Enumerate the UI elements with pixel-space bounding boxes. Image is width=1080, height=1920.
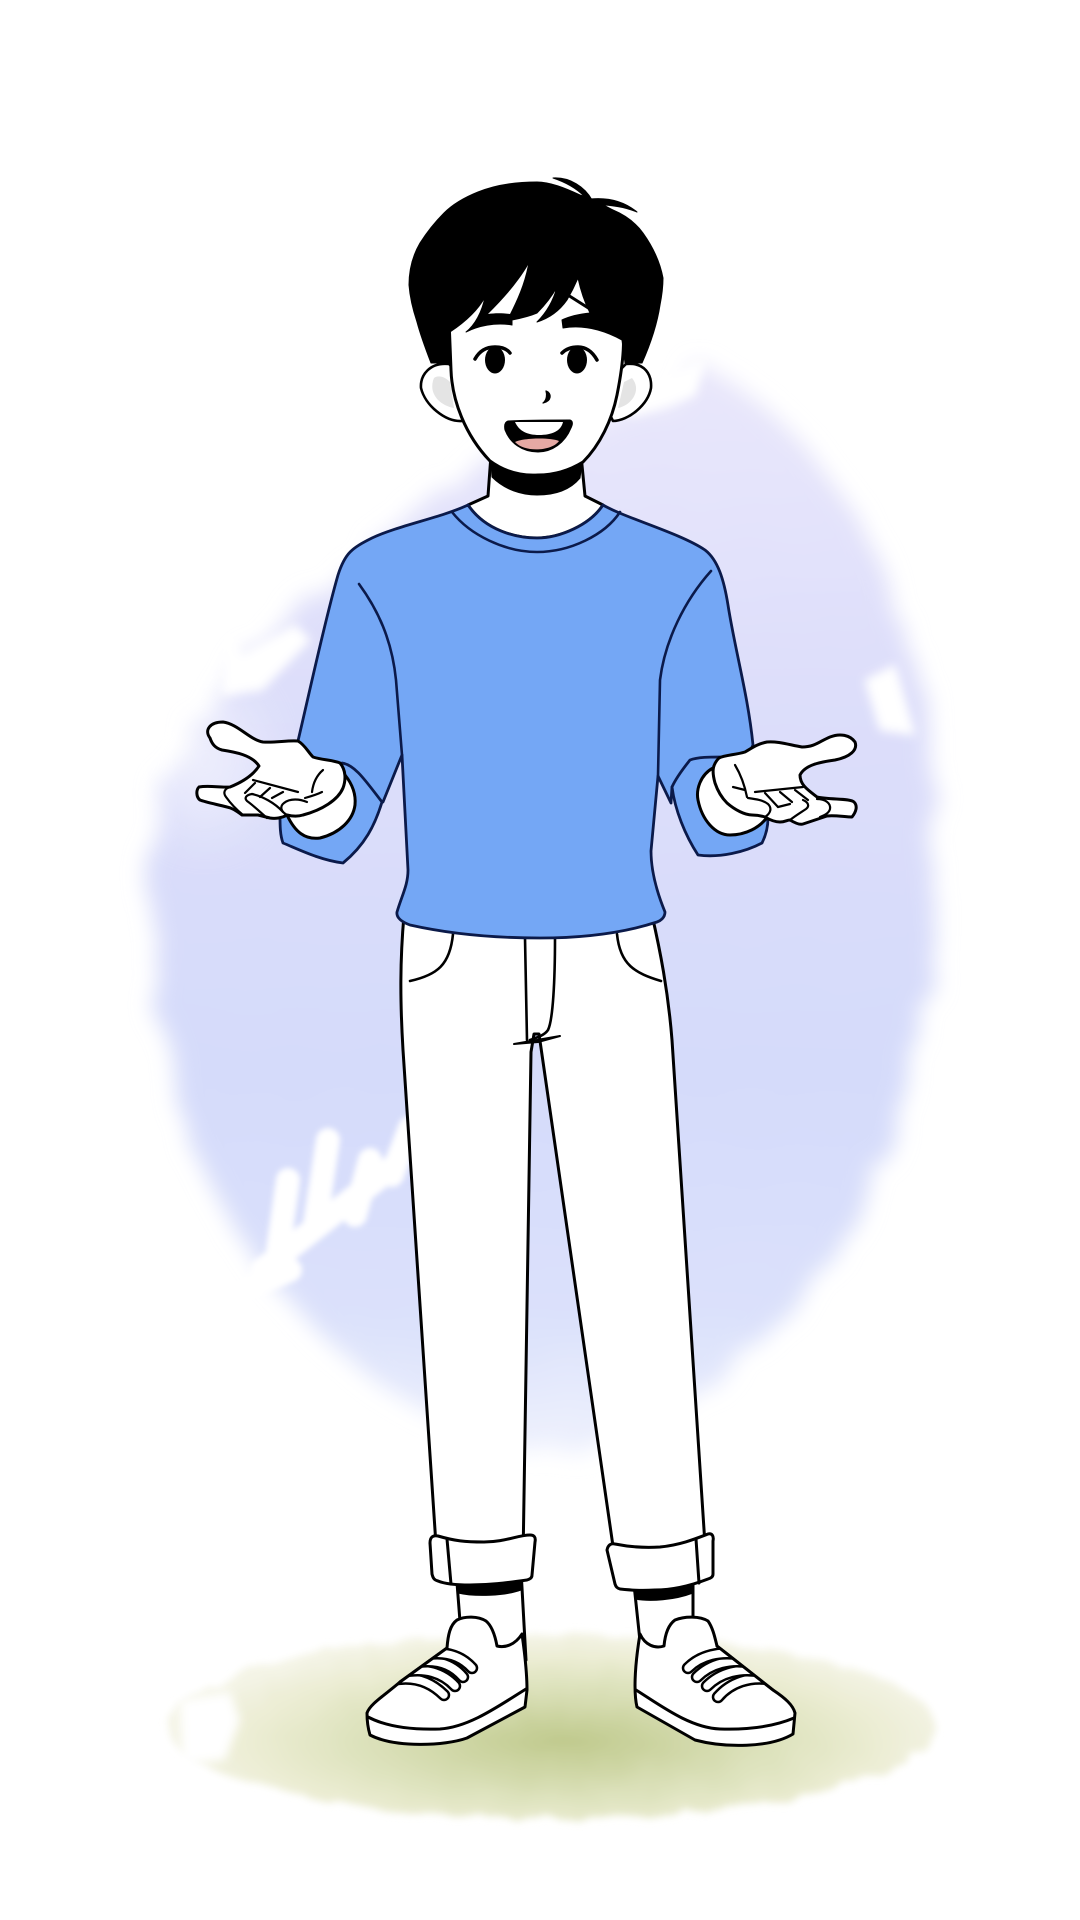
left sleeve cuff [280, 763, 382, 863]
left sole line [368, 1689, 526, 1729]
right armhole seam [658, 571, 711, 776]
neck [468, 455, 603, 538]
tongue [515, 438, 559, 449]
right trouser cuff [607, 1534, 713, 1590]
left armhole seam [359, 584, 402, 755]
ears [421, 364, 651, 421]
nose [543, 391, 550, 403]
ear shading [432, 376, 454, 408]
laces [392, 1653, 472, 1695]
shirt body [298, 505, 753, 938]
background: soft light wash at left [155, 690, 255, 830]
right sock [633, 1575, 694, 1660]
right palm and fingers [713, 735, 856, 824]
right sleeve cuff [672, 757, 768, 856]
left fingers detail [224, 770, 323, 818]
illustration: standing man with open hands [138, 177, 944, 1825]
mouth [505, 420, 572, 452]
left wrist [287, 775, 355, 838]
right wrist [698, 768, 768, 835]
left sock [456, 1570, 526, 1660]
background: olive ground shadow [168, 1634, 936, 1818]
left shoe [367, 1617, 527, 1744]
hair [409, 182, 663, 363]
trousers [401, 915, 706, 1560]
left trouser cuff [430, 1535, 535, 1585]
right sole line [636, 1690, 794, 1729]
fly tack [514, 1036, 560, 1044]
background: lavender watercolor blob [151, 358, 934, 1452]
eye: right [562, 346, 597, 374]
white fringe highlight [488, 265, 528, 314]
head [409, 178, 663, 475]
eye: left [475, 346, 510, 374]
hair strands [553, 178, 637, 212]
right shoe [635, 1617, 795, 1745]
pockets and fly [410, 934, 661, 1040]
shirt [280, 505, 768, 938]
right shoe outline [717, 1646, 773, 1690]
left shoe outline [400, 1648, 447, 1682]
face [449, 290, 624, 475]
right hand [698, 735, 856, 835]
right fingers detail [733, 765, 830, 820]
laces [688, 1653, 773, 1697]
left hand [197, 722, 355, 838]
teeth [515, 422, 563, 435]
background: white brush patches [222, 358, 915, 1290]
left palm and fingers [197, 722, 345, 818]
collar band [452, 512, 620, 552]
